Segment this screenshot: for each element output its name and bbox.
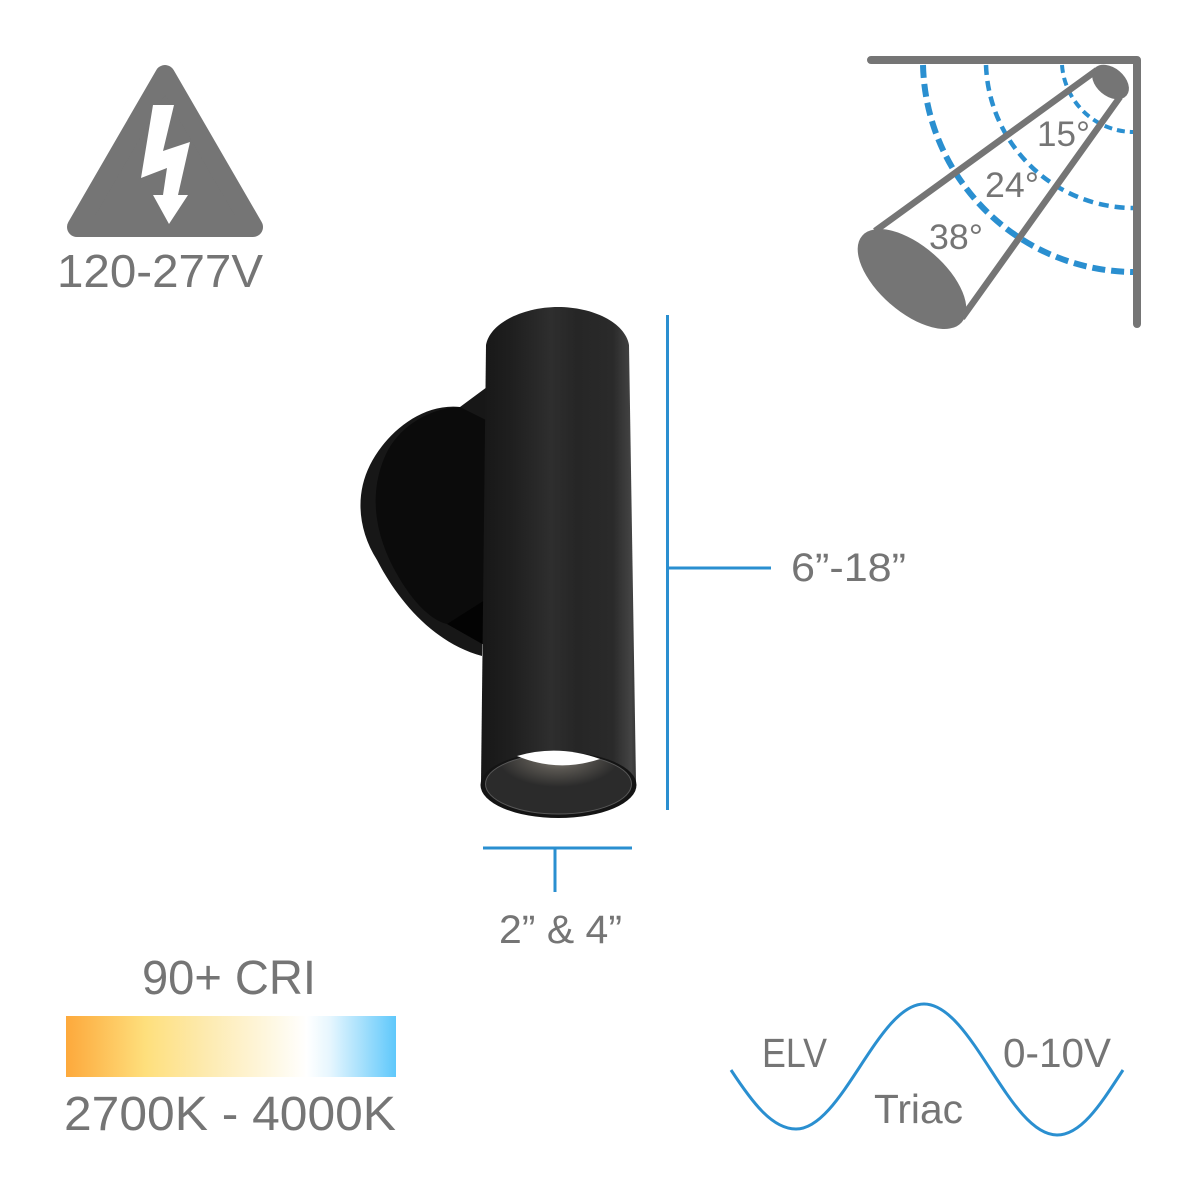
0-10V label: 0-10V: [1003, 1030, 1112, 1076]
height label: 6”-18”: [791, 546, 906, 590]
colour temperature block: [64, 952, 396, 1141]
voltage icon and label: [57, 75, 263, 297]
width label: 2” & 4”: [499, 908, 622, 952]
ceiling and wall corner: [871, 60, 1137, 324]
cylinder body: [481, 307, 636, 783]
wall mount: [360, 387, 487, 656]
angle labels: 15°: [1037, 115, 1090, 154]
dimming block: [731, 1004, 1123, 1135]
icon: warning triangle with lightning bolt: [77, 75, 253, 227]
colour temperature label: 2700K - 4000K: [64, 1088, 396, 1141]
ELV label: ELV: [762, 1030, 828, 1076]
product photo: black wall sconce: [360, 307, 636, 818]
voltage label: 120-277V: [57, 245, 263, 297]
width bracket: [483, 848, 632, 892]
lower opening: [480, 751, 636, 818]
width dimension: [483, 848, 632, 952]
Triac label: Triac: [874, 1086, 963, 1132]
beam angle arcs: [923, 65, 1133, 272]
height bracket: [668, 315, 771, 810]
beam angle diagram: 24°: [985, 166, 1039, 205]
beam angle diagram: 38°: [929, 218, 983, 257]
CRI label: 90+ CRI: [142, 952, 316, 1005]
dimming sine wave: [731, 1004, 1123, 1135]
colour temperature gradient bar: [66, 1016, 396, 1077]
beam angle diagram: [841, 58, 1137, 347]
light cone: [841, 58, 1136, 347]
height dimension: [668, 315, 906, 810]
